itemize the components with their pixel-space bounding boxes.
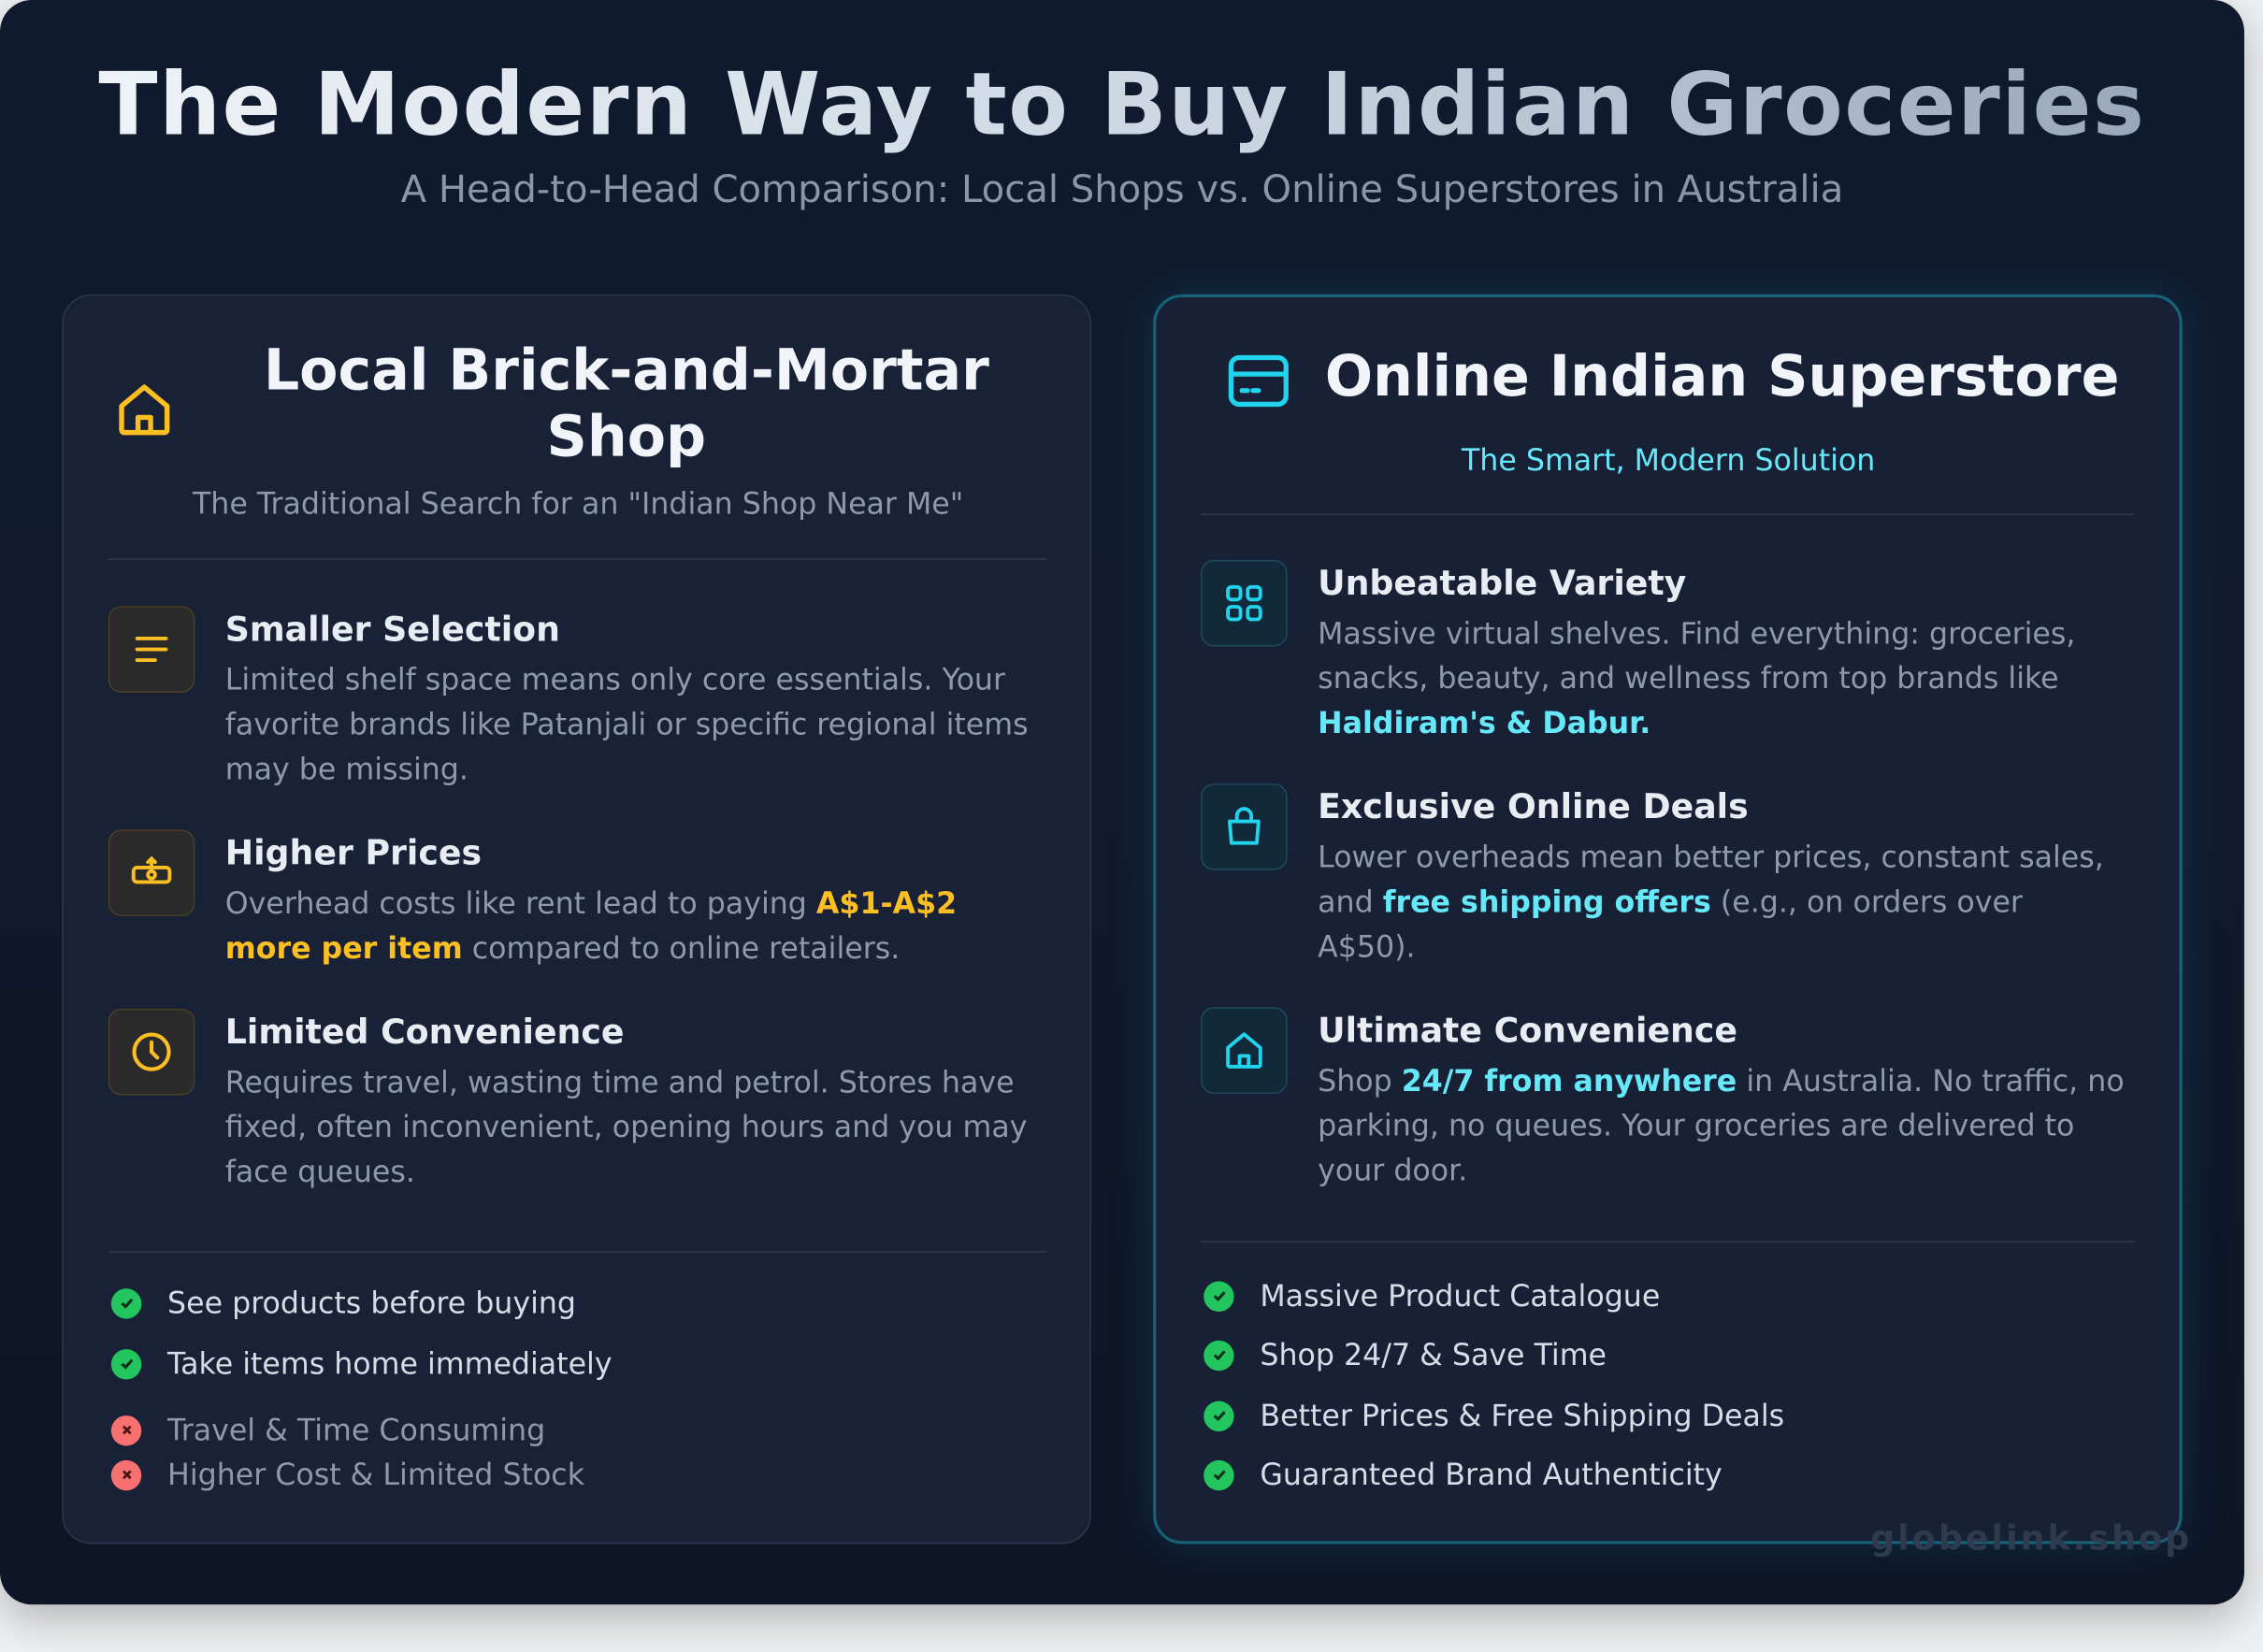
icon: grid bbox=[1201, 560, 1288, 646]
checklist: online bbox=[1204, 1278, 1784, 1492]
subtitle: A Head-to-Head Comparison: Local Shops vs. Online Superstores in Australia bbox=[401, 169, 1843, 212]
watermark: globelink.shop bbox=[1870, 1518, 2192, 1559]
item: unbeatable variety: Unbeatable Variety bbox=[1318, 563, 1686, 603]
icon: home bbox=[1201, 1007, 1288, 1094]
item: unbeatable variety bbox=[1201, 559, 2075, 740]
item: limited convenience: Requires travel, wasting time and petrol. Stores have fixed, often inconvenient, opening hours and you may face queues. bbox=[225, 1065, 1027, 1189]
subheading: online: The Smart, Modern Solution bbox=[1462, 443, 1875, 478]
item: exclusive deals bbox=[1201, 783, 2104, 964]
icon: bag bbox=[1201, 783, 1288, 870]
item: ultimate convenience: Shop 24/7 from anywhere in Australia. No traffic, no parking, no queues. Your groceries are delivered to your door. bbox=[1318, 1063, 2125, 1187]
item: smaller selection bbox=[108, 606, 1029, 786]
item: ultimate convenience: Ultimate Convenience bbox=[1318, 1010, 1737, 1051]
panel: local shop bbox=[62, 294, 1091, 1544]
checklist: local: See products before buying bbox=[167, 1286, 576, 1320]
item: smaller selection: Smaller Selection bbox=[225, 609, 560, 650]
checklist: local: Travel & Time Consuming bbox=[167, 1413, 545, 1447]
subheading: local: The Traditional Search for an "Indian Shop Near Me" bbox=[193, 486, 963, 521]
icon: clock bbox=[108, 1009, 195, 1095]
checklist: local: Higher Cost & Limited Stock bbox=[167, 1458, 584, 1492]
icon: card bbox=[1229, 355, 1289, 408]
item: unbeatable variety: Massive virtual shelves. Find everything: groceries, snacks, beauty, and wellness from top brands like Haldiram's & Dabur. bbox=[1318, 616, 2075, 740]
checklist: online: Massive Product Catalogue bbox=[1260, 1278, 1660, 1313]
heading: online: Online Indian Superstore bbox=[1325, 345, 2119, 409]
icon: list bbox=[108, 606, 195, 693]
heading: local: Local Brick-and-Mortar bbox=[264, 339, 989, 404]
checklist: online: Shop 24/7 & Save Time bbox=[1260, 1338, 1607, 1372]
item: limited convenience: Limited Convenience bbox=[225, 1012, 624, 1052]
checklist: online: Guaranteed Brand Authenticity bbox=[1260, 1458, 1722, 1492]
title: The Modern Way to Buy Indian Groceries bbox=[98, 55, 2146, 156]
item: higher prices bbox=[108, 830, 957, 966]
item: exclusive deals: Lower overheads mean better prices, constant sales, and free shipping offers (e.g., on orders over A$50). bbox=[1318, 840, 2104, 964]
icon: house bbox=[119, 384, 170, 436]
item: limited convenience bbox=[108, 1008, 1027, 1189]
item: ultimate convenience bbox=[1201, 1007, 2125, 1187]
item: higher prices: Overhead costs like rent lead to paying A$1-A$2 more per item compared to online retailers. bbox=[225, 886, 957, 966]
heading: local bbox=[264, 339, 989, 470]
item: exclusive deals: Exclusive Online Deals bbox=[1318, 786, 1749, 826]
panel: online superstore bbox=[1153, 294, 2183, 1544]
checklist: local: Take items home immediately bbox=[167, 1346, 613, 1381]
item: higher prices: Higher Prices bbox=[225, 833, 482, 873]
heading: local: Shop bbox=[546, 406, 706, 470]
icon: money bbox=[108, 829, 195, 916]
checklist: local bbox=[110, 1286, 613, 1492]
checklist: online: Better Prices & Free Shipping Deals bbox=[1260, 1399, 1784, 1433]
item: smaller selection: Limited shelf space means only core essentials. Your favorite brands like Patanjali or specific regional items may be missing. bbox=[225, 662, 1029, 786]
